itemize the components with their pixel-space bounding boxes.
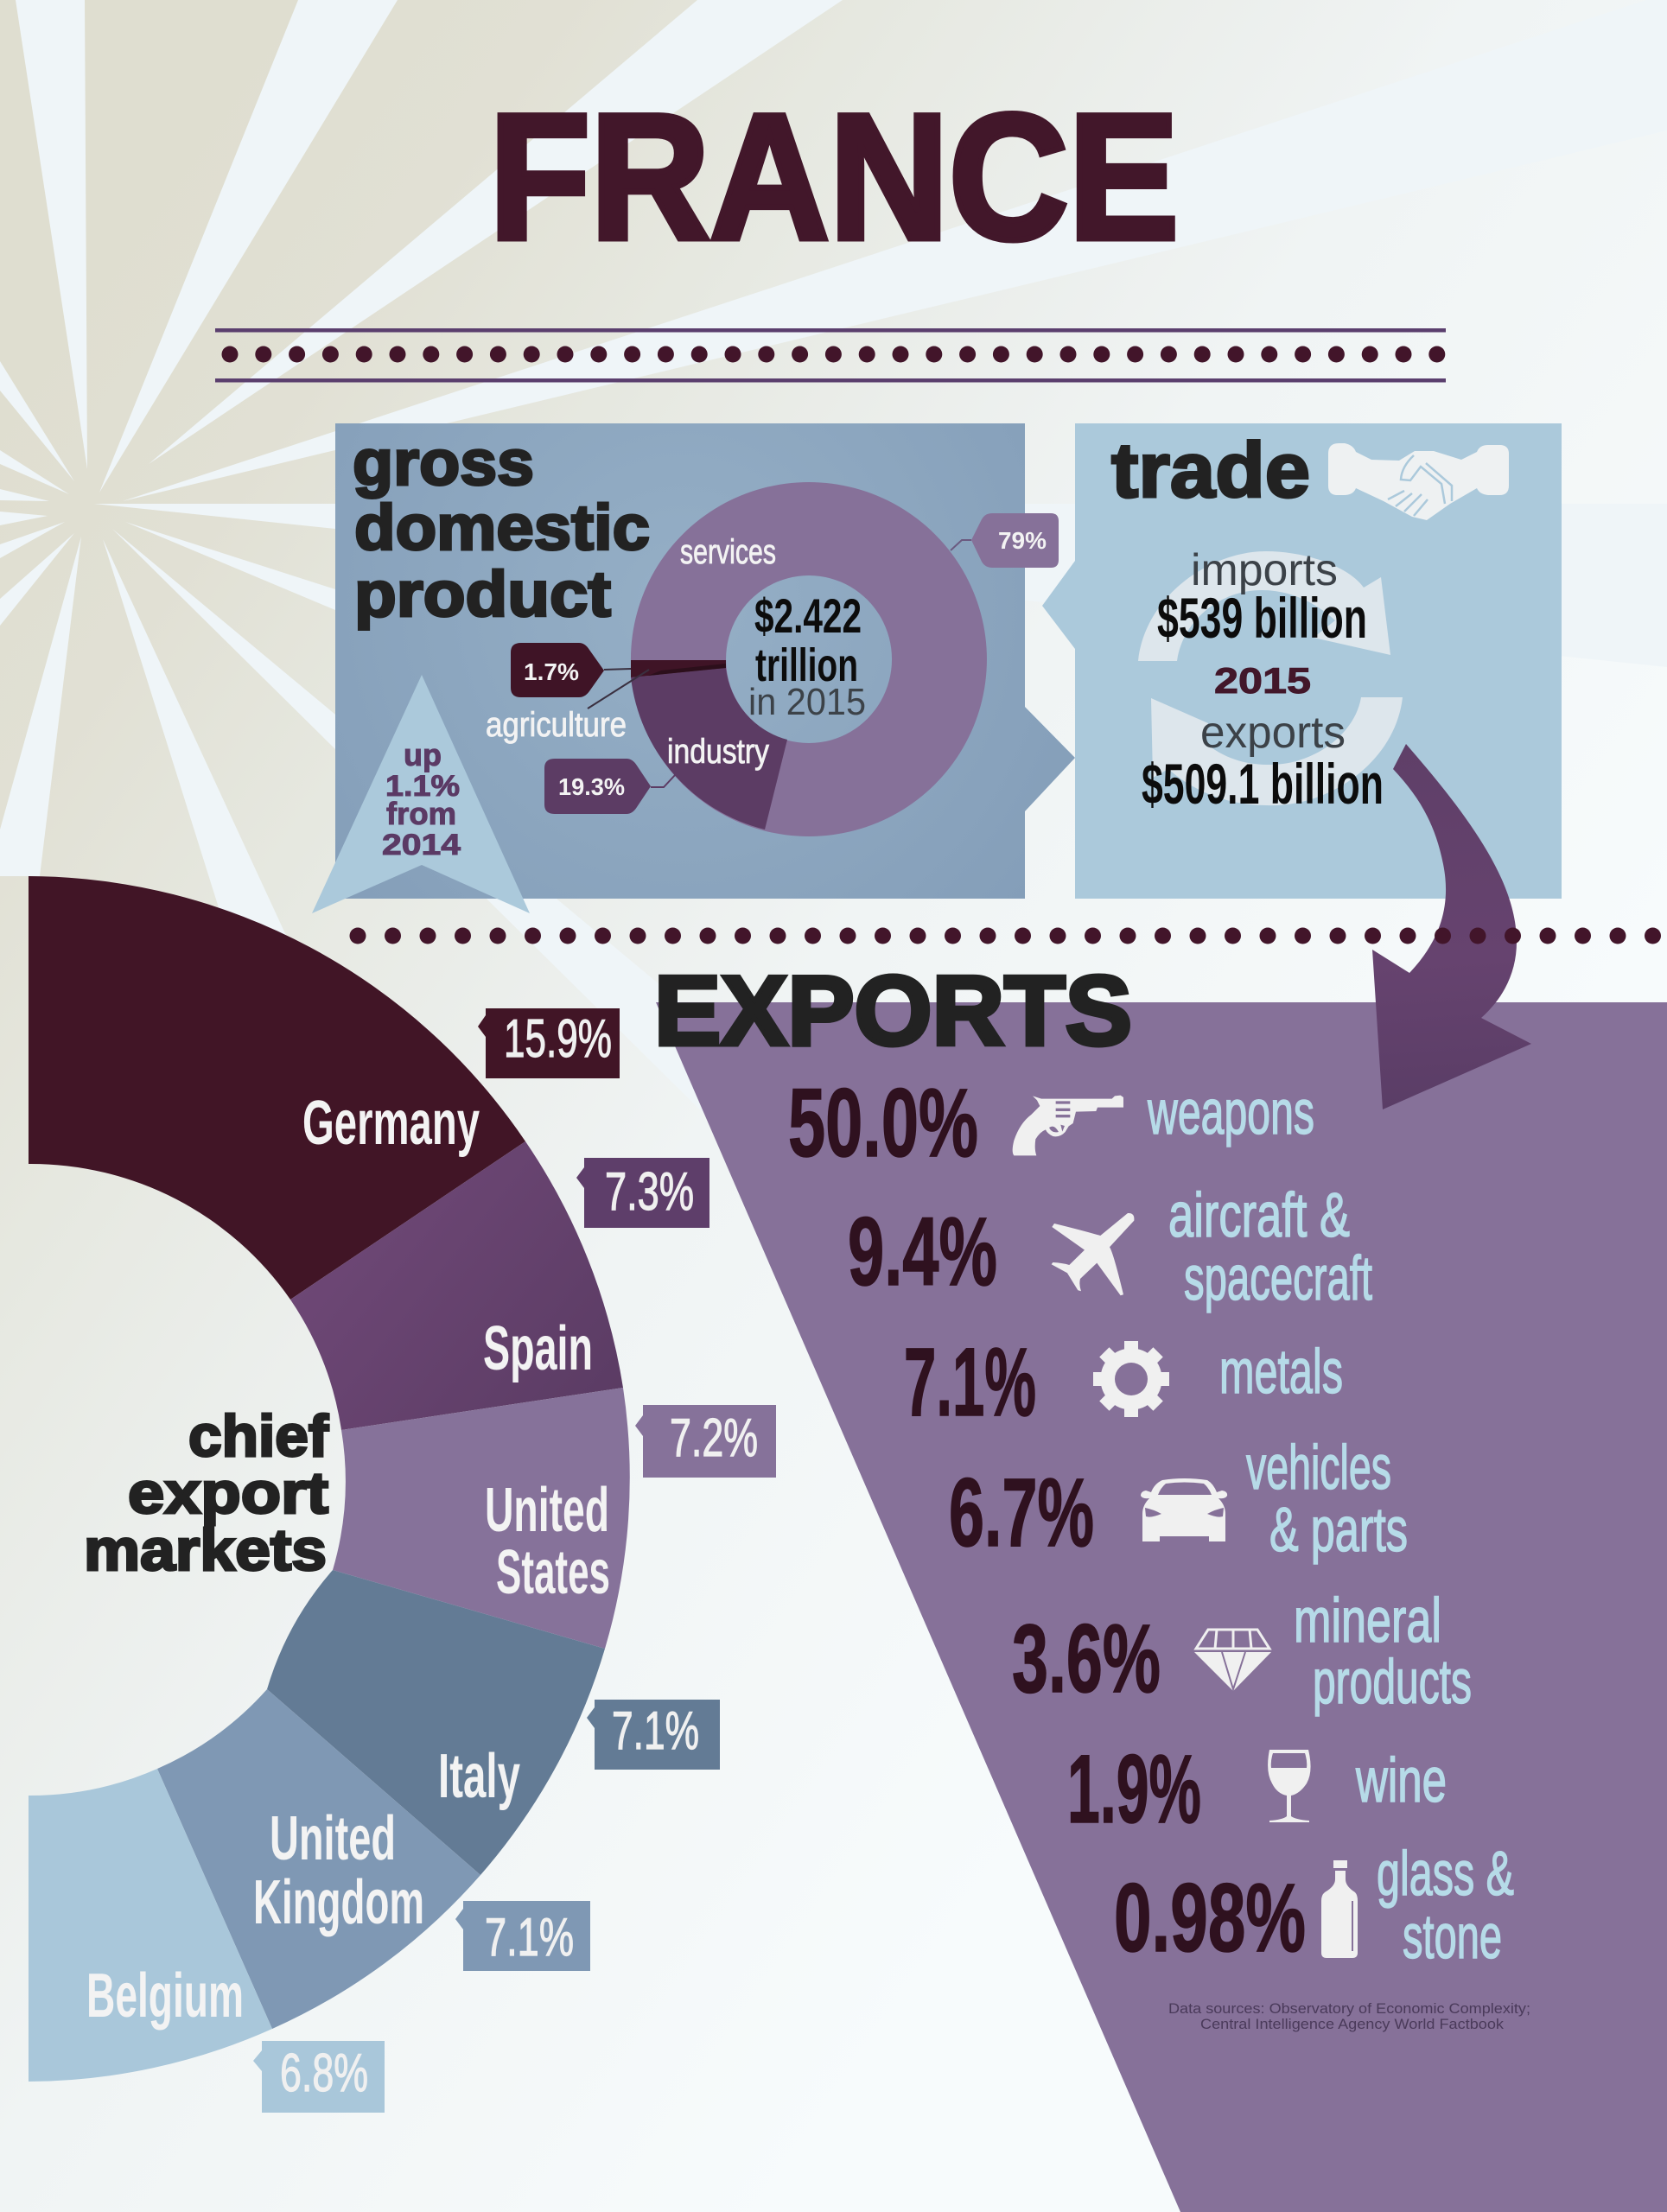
tag: Spain 7.3%: [576, 1158, 709, 1228]
tag: Belgium 6.8%: 6.8%: [280, 2044, 368, 2103]
pie title: chief: [188, 1403, 328, 1469]
donut chart: GDP composition: [631, 482, 987, 836]
item: weapons: 50.0%: [788, 1069, 978, 1177]
donut centre text: [748, 588, 866, 723]
item: vehicles & parts: & parts: [1269, 1496, 1408, 1565]
item: aircraft & spacecraft: [848, 1181, 1372, 1313]
donut centre text: in 2015: [748, 681, 866, 723]
arrowhead: up 1.1% from 2014: 1.1%: [385, 770, 460, 803]
tag: Italy 7.1%: 7.1%: [612, 1701, 699, 1761]
item: mineral products: [1012, 1586, 1472, 1717]
arrowhead: up 1.1% from 2014: up: [404, 737, 442, 772]
callout: services 79%: 79%: [998, 527, 1047, 554]
callout: agriculture 1.7%: 1.7%: [524, 658, 579, 685]
item: mineral products: mineral: [1294, 1586, 1441, 1656]
heading: gross domestic product: [353, 427, 650, 630]
segment: Italy: [267, 1570, 605, 1875]
segment: Belgium: [29, 1769, 272, 2082]
donut centre text: trillion: [755, 639, 858, 691]
arrow: trade to exports: [1372, 744, 1531, 1109]
heading: gross domestic product: product: [354, 558, 611, 630]
item: mineral products: 3.6%: [1012, 1605, 1161, 1713]
tag: Germany 15.9%: [478, 1008, 620, 1078]
country labels: Kingdom: [253, 1868, 424, 1937]
item: glass & stone: [1114, 1840, 1514, 1972]
icon: gear: [1093, 1341, 1169, 1417]
segment: United States: [333, 1388, 630, 1649]
data sources: Central Intelligence Agency World Factbook: [1200, 2016, 1505, 2032]
imports value: $539 billion: [1157, 586, 1367, 650]
callout: services 79%: [951, 513, 1059, 568]
pie title: [84, 1403, 328, 1583]
heading: gross domestic product: gross: [353, 427, 534, 499]
icon: bottle: [1321, 1860, 1358, 1958]
tag: Belgium 6.8%: [253, 2041, 385, 2113]
arrowhead: up 1.1% from 2014: [312, 675, 530, 913]
data sources: Data sources: Observatory of Economic Complexity;: [1168, 2000, 1530, 2017]
pie title: export: [128, 1460, 328, 1526]
chart: chief export markets: [29, 876, 630, 2082]
tag: United States 7.2%: [635, 1405, 776, 1478]
panel: gross domestic product: [312, 423, 1075, 913]
item: wine: wine: [1355, 1746, 1447, 1815]
callout: agriculture 1.7%: [511, 643, 649, 709]
country labels: [86, 1089, 610, 2031]
item: glass & stone: 0.98%: [1114, 1864, 1306, 1972]
segment labels: services: [680, 533, 776, 571]
donut centre text: $2.422: [754, 588, 862, 643]
item: glass & stone: glass &: [1377, 1840, 1514, 1909]
exports purple panel: [656, 1002, 1667, 2212]
country labels: United: [270, 1804, 396, 1873]
segment labels: [486, 533, 776, 771]
segment labels: industry: [667, 733, 769, 771]
icon: wine glass: [1268, 1750, 1311, 1822]
exports value: $509.1 billion: [1142, 752, 1384, 816]
year label: 2015: [1214, 660, 1311, 701]
top divider: [215, 328, 1446, 382]
heading: exports: EXPORTS: [654, 957, 1132, 1066]
data sources: [1168, 2000, 1530, 2032]
imports label: imports: [1191, 545, 1338, 595]
item: vehicles & parts: vehicles: [1246, 1433, 1391, 1503]
tag: United Kingdom 7.1%: 7.1%: [485, 1908, 574, 1967]
item: wine: 1.9%: [1067, 1735, 1201, 1843]
tag: United States 7.2%: 7.2%: [670, 1408, 758, 1468]
country labels: Belgium: [86, 1961, 244, 2031]
icon: revolver: [1013, 1096, 1123, 1155]
country labels: States: [496, 1538, 610, 1607]
item: metals: 7.1%: [904, 1328, 1036, 1436]
country labels: Italy: [438, 1742, 520, 1811]
item: aircraft & spacecraft: aircraft &: [1168, 1181, 1350, 1250]
item: aircraft & spacecraft: 9.4%: [848, 1198, 997, 1306]
country labels: Germany: [302, 1089, 480, 1158]
heading: gross domestic product: domestic: [354, 492, 650, 563]
item: vehicles & parts: 6.7%: [949, 1459, 1094, 1567]
arrowhead: up 1.1% from 2014: 2014: [382, 829, 461, 861]
item: mineral products: products: [1313, 1648, 1472, 1717]
heading: trade: trade: [1111, 428, 1310, 514]
arrowhead: up 1.1% from 2014: from: [386, 796, 456, 831]
item: vehicles & parts: [949, 1433, 1408, 1567]
icon: car: [1141, 1478, 1227, 1541]
cycle arrows: [1138, 551, 1403, 805]
item: weapons: weapons: [1147, 1078, 1314, 1147]
item: weapons: [788, 1069, 1314, 1177]
item: metals: metals: [1219, 1338, 1343, 1407]
callout: industry 19.3%: [544, 759, 676, 814]
tag: Spain 7.3%: 7.3%: [605, 1162, 694, 1222]
segment: United Kingdom: [157, 1689, 480, 2029]
middle divider dots: [358, 928, 1656, 944]
icon: diamond: [1194, 1630, 1271, 1691]
segment: Spain: [290, 1141, 623, 1430]
tag: Germany 15.9%: 15.9%: [504, 1009, 612, 1069]
country labels: Spain: [483, 1314, 593, 1383]
tag: Italy 7.1%: [587, 1700, 720, 1770]
item: glass & stone: stone: [1403, 1903, 1502, 1972]
segment labels: agriculture: [486, 706, 627, 744]
icon: handshake: [1328, 443, 1509, 520]
exports label: exports: [1200, 708, 1346, 758]
item: aircraft & spacecraft: spacecraft: [1184, 1244, 1372, 1313]
title: FRANCE: [489, 77, 1179, 276]
pie title: markets: [84, 1517, 327, 1583]
icon: plane: [1052, 1213, 1134, 1295]
panel: trade: [1042, 423, 1562, 899]
callout: industry 19.3%: 19.3%: [558, 773, 625, 800]
country labels: United: [485, 1476, 609, 1545]
item: metals: [904, 1328, 1343, 1436]
segment: Germany: [29, 876, 525, 1300]
tag: United Kingdom 7.1%: [455, 1901, 590, 1971]
item: wine: [1067, 1735, 1447, 1843]
exports list: [788, 1069, 1514, 1972]
